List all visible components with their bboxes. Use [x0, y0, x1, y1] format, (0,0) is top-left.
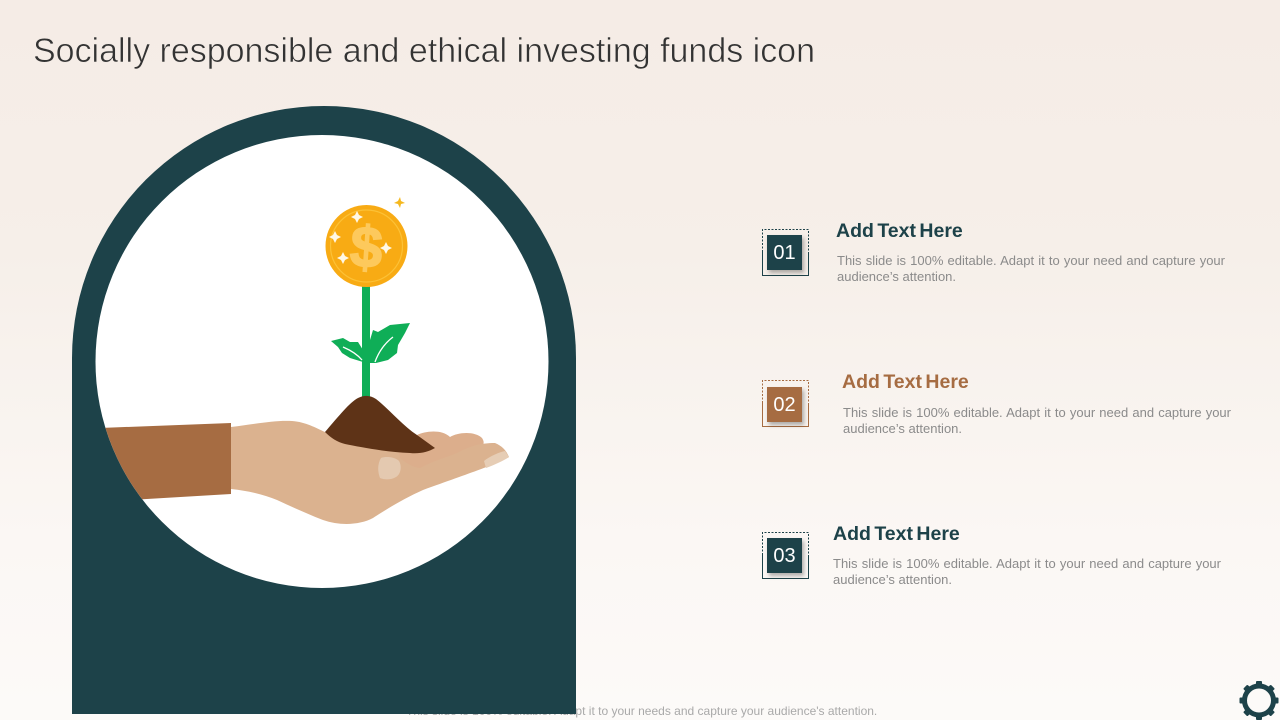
number badge 02 [762, 380, 809, 428]
heading 3: Add Text Here [833, 523, 960, 545]
sleeve [100, 423, 231, 500]
right leaf [370, 323, 410, 363]
finger tip [484, 451, 509, 468]
dollar sign: $ [348, 214, 385, 281]
footer text: This slide is 100% editable. Adapt it to your needs and capture your audience's attention. [406, 704, 877, 718]
heading 1: Add Text Here [836, 220, 963, 242]
stem [362, 284, 370, 398]
body text 1: This slide is 100% editable. Adapt it to your need and capture your audience’s attention. [837, 253, 1225, 284]
soil [325, 396, 435, 453]
thumb highlight [378, 457, 401, 479]
hand [231, 421, 509, 524]
body text 2: This slide is 100% editable. Adapt it to your need and capture your audience’s attention. [843, 405, 1231, 436]
sparkles [329, 211, 392, 264]
back fingers [395, 432, 484, 474]
item 3: 03 [773, 545, 796, 567]
coin [326, 205, 408, 287]
left leaf [331, 338, 363, 362]
item 1: 01 [773, 242, 796, 264]
icon: gear [1240, 681, 1278, 720]
white circle [96, 135, 548, 588]
item 2: 02 [773, 394, 796, 416]
arch panel [72, 106, 576, 714]
title: Socially responsible and ethical investing funds icon [33, 32, 815, 70]
body text 3: This slide is 100% editable. Adapt it to your need and capture your audience’s attention. [833, 556, 1221, 587]
heading 2: Add Text Here [842, 371, 969, 393]
illustration: hand holding coin plant in arch [72, 106, 576, 714]
number badge 01 [762, 229, 809, 276]
number badge 03 [762, 532, 809, 579]
gold sparkle [394, 197, 405, 208]
